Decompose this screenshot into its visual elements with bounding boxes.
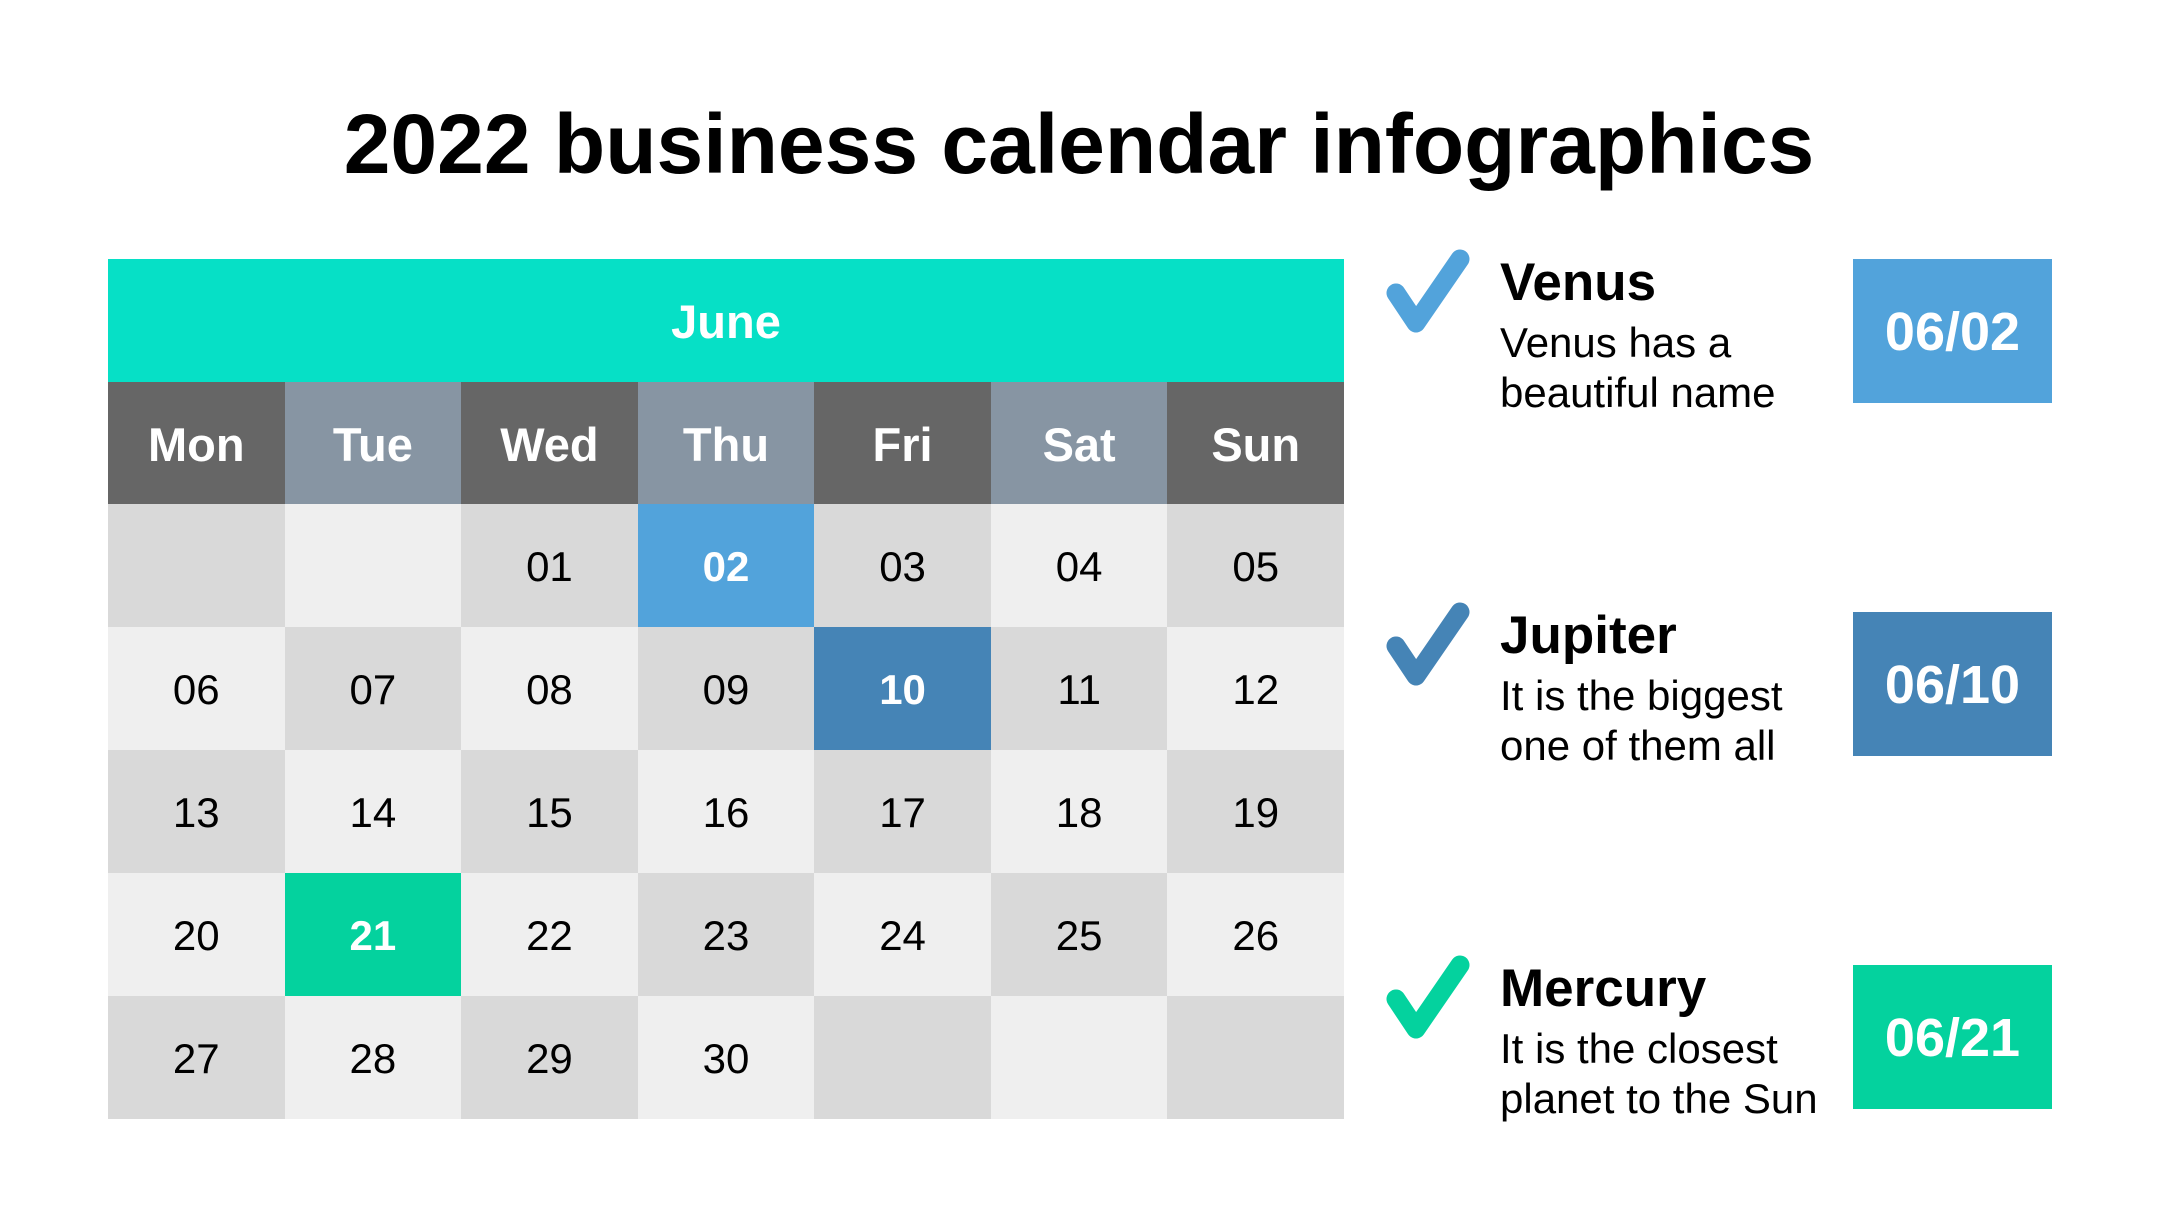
week row 2: 12 [1232,666,1279,712]
icon: blue check mark [1386,250,1470,332]
week row 3: 18 [1056,788,1102,836]
description: Jupiter [1500,672,1782,769]
week row 4: 20 [173,912,220,958]
week row 4: 22 [526,912,573,958]
week row 3: 13 [173,788,220,836]
week row 3: 14 [349,788,396,836]
icon: green check mark [1386,956,1470,1038]
week row 2: 11 [1057,666,1101,712]
month header: June [108,259,1344,382]
week row 2: 07 [349,666,396,712]
week row 5 [108,996,1344,1119]
description: Jupiter: one of them all [1500,722,1776,769]
week row 2 [108,627,1344,750]
weekday header row: Thu [683,418,769,470]
date badge: 06/02: 06/02 [1885,302,2020,362]
week row 3 [108,750,1344,873]
description: Venus: beautiful name [1500,369,1776,416]
highlighted date: June 10: 10 [879,666,926,712]
description: Mercury: It is the closest [1500,1025,1778,1072]
week row 4: 24 [879,912,926,958]
week row 1: 04 [1056,542,1102,590]
weekday header row: Wed [500,418,599,470]
week row 5: 29 [526,1034,573,1082]
description: Venus [1500,319,1776,416]
title: 2022 business calendar infographics [344,96,1814,190]
week row 4 [108,873,1344,996]
week row 1: 05 [1232,542,1279,590]
description: Jupiter: It is the biggest [1500,672,1782,719]
weekday header row [108,382,1344,504]
week row 1: 03 [879,542,926,590]
month header: June: June [671,295,781,348]
description: Venus: Venus has a [1500,319,1731,366]
date badge: 06/21 [1853,965,2052,1109]
highlighted date: June 10 [814,627,991,750]
weekday header row: Fri [873,418,933,470]
week row 5: 28 [349,1034,396,1082]
week row 3: 15 [526,788,573,836]
icon: dark blue check mark [1386,602,1470,686]
week row 5: 30 [703,1034,749,1082]
week row 2: 06 [173,666,220,712]
week row 5: 27 [173,1034,220,1082]
week row 3: 19 [1232,788,1279,836]
highlighted date: June 21: 21 [349,912,396,958]
panel: Mercury [1386,956,2052,1122]
week row 4: 23 [703,912,749,958]
week row 2: 08 [526,666,573,712]
weekday header row: Tue [333,418,413,470]
description: Mercury: planet to the Sun [1500,1075,1818,1122]
week row 4: 25 [1056,912,1102,958]
week row 4: 26 [1232,912,1279,958]
date badge: 06/21: 06/21 [1885,1008,2020,1068]
highlighted date: June 2 [638,504,814,627]
panel: Jupiter [1386,602,2052,769]
weekday header row: Sat [1043,418,1116,470]
heading: Mercury: Mercury [1500,959,1706,1018]
description: Mercury [1500,1025,1818,1122]
calendar [108,259,1344,1119]
heading: Venus: Venus [1500,253,1656,312]
week row 1: 01 [526,542,573,590]
highlighted date: June 21 [285,873,461,996]
heading: Jupiter: Jupiter [1500,606,1677,665]
week row 3: 16 [703,788,749,836]
date badge: 06/10 [1853,612,2052,756]
week row 2: 09 [703,666,749,712]
panel: Venus [1386,250,2052,416]
weekday header row: Mon [148,418,245,470]
week row 1 [108,504,1344,627]
weekday header row: Sun [1211,418,1300,470]
highlighted date: June 2: 02 [703,542,749,590]
date badge: 06/10: 06/10 [1885,655,2020,715]
week row 3: 17 [879,788,926,836]
date badge: 06/02 [1853,259,2052,403]
